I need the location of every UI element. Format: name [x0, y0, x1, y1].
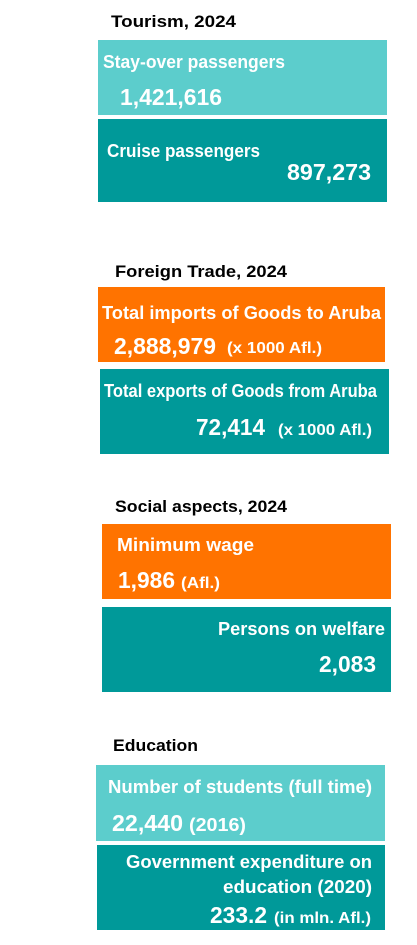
card: cruise passengers: Cruise passengers: [107, 141, 260, 161]
card: number of students: Number of students (full time): [108, 777, 372, 797]
card: total exports: (x 1000 Afl.): [278, 422, 372, 439]
card: persons on welfare: [102, 607, 391, 692]
panel: tourism: [98, 12, 387, 202]
panel: foreign trade: [98, 262, 389, 454]
heading: tourism: Tourism, 2024: [111, 12, 237, 31]
card: total imports: [98, 287, 385, 362]
card: number of students: [96, 765, 385, 841]
heading: social aspects: Social aspects, 2024: [115, 497, 288, 516]
card: government expenditure on education: (in mln. Afl.): [274, 910, 371, 927]
card: persons on welfare: 2,083: [319, 651, 376, 677]
card: cruise passengers: [98, 119, 387, 202]
card: total exports: Total exports of Goods from Aruba: [104, 381, 378, 401]
card: government expenditure on education: [97, 845, 385, 930]
card: cruise passengers: 897,273: [287, 159, 371, 185]
card: government expenditure on education: education (2020): [223, 877, 372, 897]
card: number of students: (2016): [189, 815, 246, 835]
heading: education: Education: [113, 736, 198, 755]
card: total imports: (x 1000 Afl.): [227, 340, 322, 357]
card: total exports: [100, 369, 389, 454]
card: stay-over passengers: 1,421,616: [120, 84, 222, 110]
card: government expenditure on education: Government expenditure on: [126, 852, 372, 872]
card: minimum wage: (Afl.): [181, 575, 220, 592]
card: total imports: Total imports of Goods to Aruba: [102, 303, 382, 323]
card: minimum wage: Minimum wage: [117, 535, 254, 555]
card: persons on welfare: Persons on welfare: [218, 619, 385, 639]
heading: foreign trade: Foreign Trade, 2024: [115, 262, 288, 281]
card: total exports: 72,414: [196, 414, 265, 440]
card: stay-over passengers: Stay-over passengers: [103, 52, 285, 72]
card: minimum wage: 1,986: [118, 567, 175, 593]
card: government expenditure on education: 233.2: [210, 902, 267, 928]
card: stay-over passengers: [98, 40, 387, 115]
panel: social aspects: [102, 497, 391, 692]
card: number of students: 22,440: [112, 810, 183, 836]
card: minimum wage: [102, 524, 391, 599]
card: total imports: 2,888,979: [114, 333, 216, 359]
panel: education: [96, 736, 385, 930]
